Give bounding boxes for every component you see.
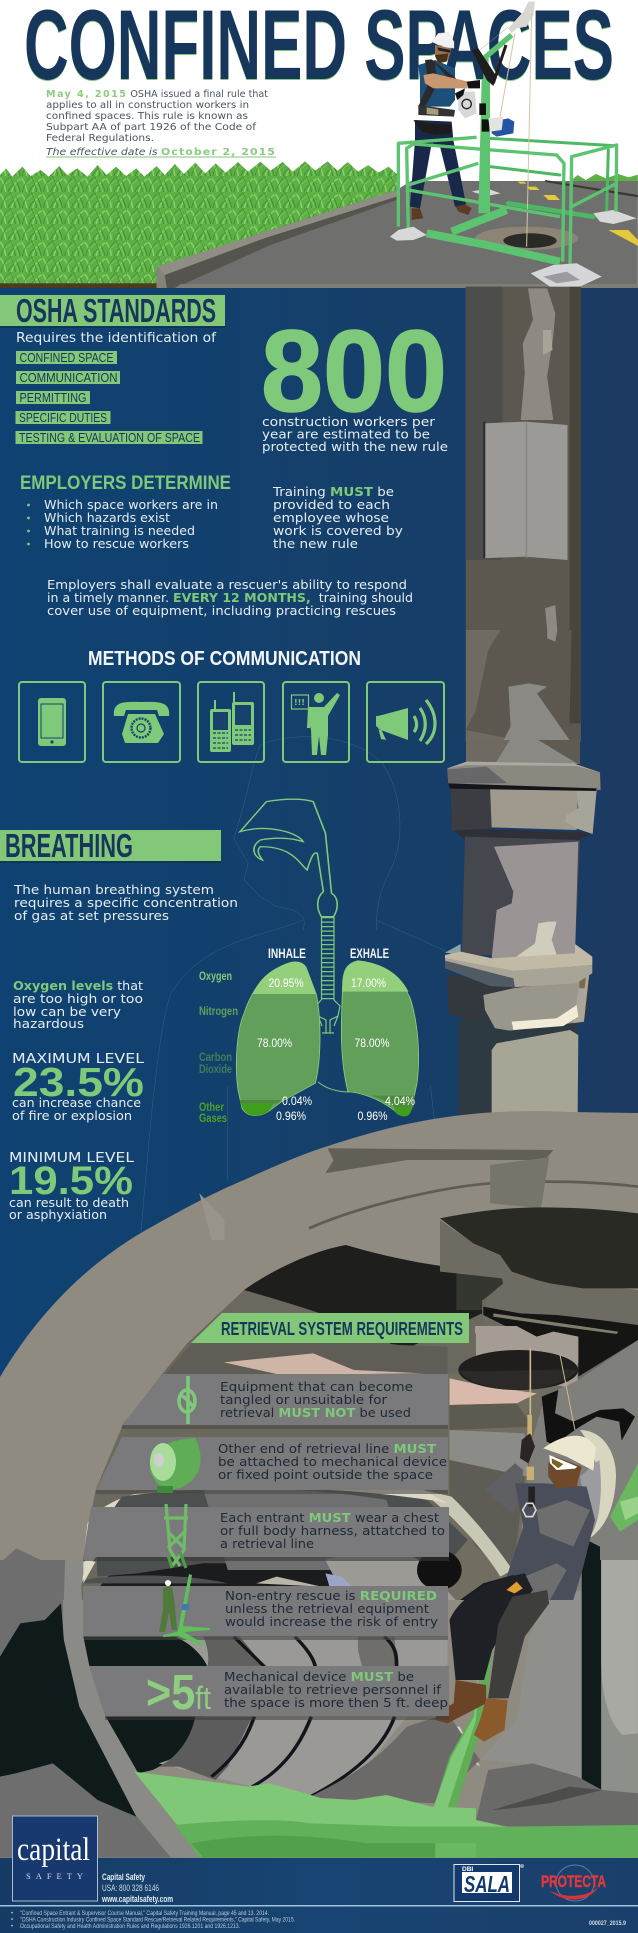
rescuer evaluation text: cover use of equipment, including practicing rescues xyxy=(47,603,396,618)
lung labels: INHALE xyxy=(268,945,306,961)
tunnel ceiling shadows xyxy=(440,1207,638,1467)
maximum level stat xyxy=(12,1051,145,1123)
rescuer evaluation text: in a timely manner. EVERY 12 MONTHS, training should xyxy=(47,590,413,605)
lung labels: Other xyxy=(199,1100,224,1114)
training text: employee whose xyxy=(273,510,389,525)
requirement row 3: a retrieval line xyxy=(220,1537,314,1552)
lung labels: 4.04% xyxy=(385,1094,415,1108)
capital safety logo: capital xyxy=(17,1832,90,1868)
maximum level stat: can increase chance xyxy=(12,1095,141,1110)
employers list: How to rescue workers xyxy=(44,536,189,551)
maximum level stat: MAXIMUM LEVEL xyxy=(12,1051,145,1067)
icon: smartphone xyxy=(19,682,85,762)
icon: self-retracting device xyxy=(150,1438,201,1493)
requirement row 3 xyxy=(83,1504,449,1568)
minimum level stat xyxy=(9,1150,135,1222)
breathing heading bar: BREATHING xyxy=(5,827,133,864)
minimum level stat: 19.5% xyxy=(9,1159,133,1203)
stat caption: protected with the new rule xyxy=(262,439,448,454)
icon: person signalling with posted sign xyxy=(283,682,349,762)
training text: work is covered by xyxy=(273,523,404,538)
stat caption xyxy=(262,414,448,454)
osha heading bar xyxy=(0,292,225,329)
intro text: Federal Regulations. xyxy=(46,133,154,144)
footnotes: • xyxy=(11,1911,13,1917)
icon: telephone xyxy=(103,682,180,762)
osha tags: SPECIFIC DUTIES xyxy=(19,410,107,425)
logo: DBI SALA: DBI xyxy=(462,1866,473,1873)
intro text: confined spaces. This rule is known as xyxy=(46,111,248,122)
maximum level stat: 23.5% xyxy=(13,1059,144,1105)
breathing intro xyxy=(13,882,238,923)
osha tags: PERMITTING xyxy=(20,390,86,405)
lung labels: 17.00% xyxy=(351,976,386,990)
logo: PROTECTA: PROTECTA xyxy=(541,1872,606,1891)
trachea and bronchi xyxy=(316,917,350,1092)
lung labels: Dioxide xyxy=(199,1062,232,1076)
page background xyxy=(0,0,638,287)
requirement row 4: unless the retrieval equipment xyxy=(225,1602,429,1617)
requirement row 1 xyxy=(122,1374,448,1429)
breathing intro: The human breathing system xyxy=(13,882,214,897)
stat caption: construction workers per xyxy=(262,414,436,429)
intro text: applies to all in construction workers in xyxy=(46,100,249,111)
pipe lower with two flanges xyxy=(445,740,601,1115)
requirement row 1: retrieval MUST NOT be used xyxy=(220,1406,411,1421)
icon: greater than five feet: >5ft xyxy=(146,1666,211,1720)
osha tags: COMMUNICATION xyxy=(20,370,118,385)
lung labels: 0.96% xyxy=(276,1109,306,1123)
osha tags: CONFINED SPACE xyxy=(20,350,114,365)
minimum level stat: MINIMUM LEVEL xyxy=(9,1150,135,1166)
footnotes: • xyxy=(11,1918,13,1924)
minimum level stat: can result to death xyxy=(9,1195,129,1210)
requirement row 4: would increase the risk of entry xyxy=(225,1615,438,1630)
osha tags xyxy=(16,350,202,445)
icon: full body harness xyxy=(164,1504,188,1568)
requirement row 2: be attached to mechanical device xyxy=(218,1455,447,1470)
breathing intro: requires a specific concentration xyxy=(14,895,238,910)
lung labels: 78.00% xyxy=(354,1036,390,1050)
breathing intro: of gas at set pressures xyxy=(14,908,169,923)
training text: provided to each xyxy=(273,497,390,512)
lung labels: 0.96% xyxy=(358,1109,388,1123)
big stat 800: 800 xyxy=(261,306,447,436)
airway outline xyxy=(240,799,337,917)
company contact: Capital Safety xyxy=(102,1872,145,1882)
stat caption: year are estimated to be xyxy=(262,426,430,442)
lung labels: Nitrogen xyxy=(199,1004,238,1018)
icon: two-way radios xyxy=(198,682,264,762)
employers list: What training is needed xyxy=(44,523,195,538)
employers list: Which hazards exist xyxy=(44,510,170,525)
requirement row 2 xyxy=(96,1437,448,1494)
lung labels: Carbon xyxy=(199,1050,232,1064)
road and curb xyxy=(157,180,638,288)
barrel lower tunnel xyxy=(0,1560,638,1858)
requirement row 4 xyxy=(83,1574,448,1646)
lung labels xyxy=(199,945,415,1125)
toxic green pool and stream xyxy=(134,1633,638,1858)
requirement row 5: available to retrieve personnel if xyxy=(224,1683,442,1698)
grass xyxy=(0,161,638,288)
footnotes: • xyxy=(11,1924,13,1930)
oxygen levels text: are too high or too xyxy=(13,991,143,1006)
company contact: www.capitalsafety.com xyxy=(101,1894,173,1904)
tunnel outer wall xyxy=(0,1111,638,1858)
intro text: Subpart AA of part 1926 of the Code of xyxy=(46,122,257,133)
retrieval heading bar: RETRIEVAL SYSTEM REQUIREMENTS xyxy=(221,1319,463,1339)
rescuer evaluation text xyxy=(47,577,413,618)
footnotes: "OSHA Construction Industry Confined Space Standard Rescue/Retrieval Related Requirements," Capital Safety, May 2015. xyxy=(20,1918,295,1924)
company contact xyxy=(101,1872,173,1904)
lung labels: 20.95% xyxy=(268,976,304,990)
tunnel interior xyxy=(0,1245,638,1600)
osha heading bar: OSHA STANDARDS xyxy=(16,292,216,329)
icon: megaphone xyxy=(367,682,444,762)
lungs chart xyxy=(236,961,419,1117)
logo: DBI SALA xyxy=(454,1864,524,1902)
lung labels: Oxygen xyxy=(199,969,232,983)
intro text: The effective date is October 2, 2015 xyxy=(46,147,276,158)
intro text: May 4, 2015 OSHA issued a final rule that xyxy=(46,89,268,100)
oxygen levels text xyxy=(13,978,143,1031)
retrieval heading bar xyxy=(191,1313,469,1343)
pipe upper xyxy=(466,287,581,630)
lung labels: Gases xyxy=(199,1111,227,1125)
logo: DBI SALA: SALA xyxy=(464,1871,510,1897)
capital safety logo xyxy=(12,1816,98,1901)
capital safety logo: SAFETY xyxy=(26,1871,83,1881)
footnotes: Occupational Safety and Health Administration Rules and Regulations 1926.1201 and 1926.1213. xyxy=(20,1924,240,1930)
employers list xyxy=(27,497,218,551)
worker hanging on line xyxy=(460,1348,638,1600)
requirement row 5: Mechanical device MUST be xyxy=(224,1670,414,1685)
oxygen levels text: Oxygen levels that xyxy=(13,978,143,993)
employers determine heading: EMPLOYERS DETERMINE xyxy=(20,473,231,494)
faint head outline xyxy=(140,737,447,1240)
requirement row 2: or fixed point outside the space xyxy=(218,1468,433,1483)
lung labels: 78.00% xyxy=(257,1036,292,1050)
rescuer evaluation text: Employers shall evaluate a rescuer's ability to respond xyxy=(47,577,407,592)
osha tags: TESTING & EVALUATION OF SPACE xyxy=(19,430,200,445)
osha intro: Requires the identification of xyxy=(16,330,217,346)
icon: worker with davit xyxy=(159,1574,210,1646)
icon: knot xyxy=(179,1376,195,1424)
minimum level stat: or asphyxiation xyxy=(9,1207,107,1222)
footnotes xyxy=(11,1911,295,1930)
footer band xyxy=(0,1858,638,1933)
lung labels: 0.04% xyxy=(282,1094,312,1108)
employers list: Which space workers are in xyxy=(44,497,218,512)
company contact: USA: 800 328 6146 xyxy=(102,1883,159,1893)
requirement row 4: Non-entry rescue is REQUIRED xyxy=(225,1589,437,1604)
oxygen levels text: low can be very xyxy=(13,1004,122,1019)
requirement row 5: the space is more then 5 ft. deep xyxy=(224,1696,448,1711)
requirement row 3: Each entrant MUST wear a chest xyxy=(220,1511,439,1526)
training text: the new rule xyxy=(273,536,358,551)
training text xyxy=(272,484,404,551)
document code: 000027_2015.9 xyxy=(589,1920,626,1927)
worker at manhole with davit and guard rail xyxy=(390,2,638,287)
training text: Training MUST be xyxy=(272,484,394,499)
maximum level stat: of fire or explosion xyxy=(12,1108,132,1123)
pipe middle above flange xyxy=(466,630,581,747)
oxygen levels text: hazardous xyxy=(13,1016,84,1031)
requirement row 2: Other end of retrieval line MUST xyxy=(218,1442,436,1457)
methods heading: METHODS OF COMMUNICATION xyxy=(88,648,361,670)
intro text xyxy=(46,89,276,158)
footnotes: "Confined Space Entrant & Supervisor Course Manual," Capital Safety Training Manual, page 45 and 13. 2014. xyxy=(20,1911,269,1917)
lung labels: EXHALE xyxy=(350,945,389,961)
requirement row 1: tangled or unsuitable for xyxy=(220,1393,388,1408)
tunnel rim details xyxy=(199,1148,638,1240)
icon: person signalling with posted sign: !!! xyxy=(294,698,305,707)
requirement row 5 xyxy=(89,1666,449,1720)
requirement row 1: Equipment that can become xyxy=(220,1380,413,1395)
requirement row 3: or full body harness, attatched to xyxy=(220,1524,445,1539)
logo: PROTECTA xyxy=(541,1865,606,1901)
worker legs and boots xyxy=(435,1573,549,1742)
